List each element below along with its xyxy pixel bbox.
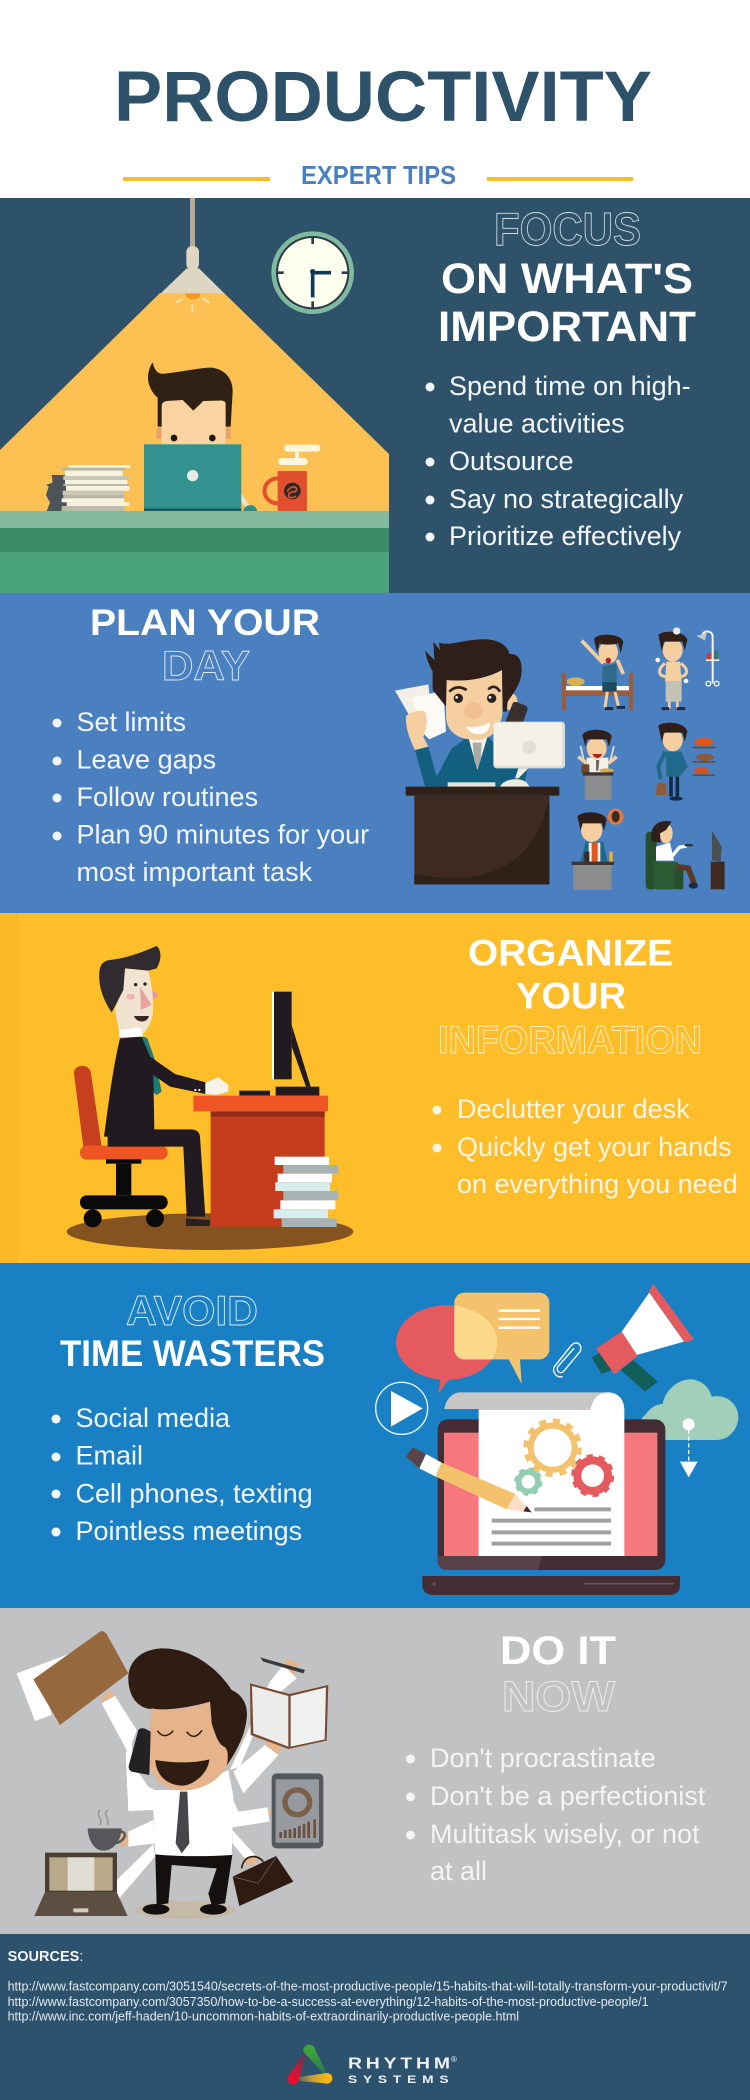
ear — [504, 693, 517, 710]
mini scene: shower — [655, 627, 719, 709]
mini scene: watching tv — [646, 821, 725, 889]
man on the phone at desk — [395, 639, 565, 884]
hand — [406, 711, 428, 750]
logo registered mark: ® — [451, 2055, 457, 2064]
icon: briefcase — [233, 1856, 293, 1906]
icon: open book — [250, 1683, 328, 1749]
cuff buttons — [194, 1089, 200, 1091]
bullet list: focus: Say no strategically — [449, 484, 684, 514]
illustration: multitasking man — [17, 1631, 328, 1919]
panel: focus — [0, 198, 750, 593]
icon: wall clock — [271, 231, 354, 314]
heading: focus on what's important: IMPORTANT — [438, 303, 696, 351]
panel: do it now — [0, 1608, 750, 1934]
bullet list: plan: Plan 90 minutes for your — [76, 820, 369, 850]
heading: focus on what's important: ON WHAT'S — [441, 255, 693, 303]
header — [0, 0, 750, 198]
logo wordmark: RHYTHM — [348, 2054, 450, 2072]
nose — [464, 702, 483, 719]
icon: coffee cup — [88, 1810, 125, 1851]
illustration: man under lamp — [0, 198, 389, 593]
icon: paperclip — [554, 1343, 581, 1377]
bullet list: plan: Set limits — [76, 707, 186, 737]
floor shadow — [67, 1213, 353, 1250]
bullet list: do it now: Don't be a perfectionist — [430, 1781, 706, 1811]
stack of books — [274, 1157, 338, 1227]
suit and trousers — [104, 1037, 207, 1217]
subtitle: EXPERT TIPS — [301, 160, 456, 190]
bullet list: focus: value activities — [449, 408, 625, 438]
heading: organize your information — [438, 932, 702, 1062]
laptop — [144, 444, 241, 511]
bullet list: avoid: Email — [76, 1441, 143, 1471]
collar — [119, 1027, 143, 1037]
icon: cloud — [640, 1379, 738, 1477]
desk — [406, 787, 559, 884]
icon: tablet — [272, 1773, 323, 1848]
title: PRODUCTIVITY — [114, 58, 652, 137]
bullet list: avoid — [52, 1403, 313, 1546]
sources heading: SOURCES: — [8, 1949, 83, 1965]
bullet list: plan: Leave gaps — [76, 745, 216, 775]
heading: plan your day: PLAN YOUR — [90, 601, 320, 643]
bullet list: avoid: Social media — [76, 1403, 231, 1433]
bullet list: organize: Declutter your desk — [457, 1094, 690, 1124]
shirt and arms — [102, 1665, 297, 1899]
bullet list: avoid: Pointless meetings — [76, 1516, 302, 1546]
document — [444, 1392, 624, 1556]
panel: sources footer — [0, 1934, 750, 2100]
logo mark — [287, 2045, 332, 2084]
bullet list: do it now: Don't procrastinate — [430, 1743, 656, 1773]
icon: megaphone — [592, 1284, 694, 1392]
source links — [8, 1979, 728, 2024]
illustration: laptop and media icons — [376, 1284, 738, 1595]
bullet list: focus: Prioritize effectively — [449, 521, 682, 551]
shoe — [186, 1218, 210, 1226]
bullet list: do it now — [406, 1743, 706, 1886]
hand — [205, 1077, 228, 1095]
subtitle rule right — [487, 177, 633, 181]
face — [147, 1702, 228, 1791]
desk — [0, 511, 389, 593]
bullet list: organize — [432, 1094, 738, 1199]
heading: plan your day: DAY — [162, 642, 250, 689]
shirt and tie — [468, 737, 487, 770]
source links: http://www.fastcompany.com/3051540/secrets-of-the-most-productive-people/15-habits-that-will-totally-transform-your-productivit/7 — [8, 1979, 728, 1994]
heading: avoid time wasters — [60, 1287, 325, 1374]
bullet list: organize: on everything you need — [457, 1169, 738, 1199]
ear — [224, 1733, 234, 1766]
heading: avoid time wasters: AVOID — [126, 1287, 258, 1334]
keyboard — [448, 782, 495, 787]
man head — [148, 362, 233, 445]
mouth — [134, 1016, 149, 1021]
panel: plan your day — [0, 593, 750, 913]
mouth — [155, 1759, 209, 1786]
heading: focus on what's important: FOCUS — [494, 203, 641, 255]
heading: organize your information: YOUR — [516, 976, 626, 1016]
hair — [128, 1648, 247, 1766]
illustration: man at computer desk — [67, 946, 353, 1250]
monitor — [493, 722, 565, 787]
gears — [516, 1421, 612, 1495]
heading: avoid time wasters: TIME WASTERS — [60, 1332, 325, 1374]
logo: rhythm systems — [287, 2045, 457, 2086]
floor shadow — [134, 1901, 236, 1919]
source links: http://www.inc.com/jeff-haden/10-uncommon-habits-of-extraordinarily-productive-people.html — [8, 2009, 519, 2024]
icon: play button — [376, 1382, 428, 1434]
bullet list: plan: Follow routines — [76, 782, 258, 812]
keyboard — [239, 1091, 270, 1096]
logo subline: SYSTEMS — [348, 2073, 449, 2086]
heading: plan your day — [90, 601, 320, 689]
icon: laptop — [34, 1853, 128, 1916]
hair — [99, 946, 160, 1013]
chair — [74, 1066, 168, 1227]
tie — [176, 1792, 189, 1853]
heading: do it now — [500, 1629, 616, 1721]
face — [446, 670, 503, 740]
pencil — [406, 1447, 532, 1512]
illustration group: daily routine — [395, 627, 725, 890]
bullet list: plan — [52, 707, 369, 887]
subtitle rule left — [123, 177, 270, 181]
eyes — [134, 982, 147, 986]
hair — [425, 639, 522, 712]
phone — [129, 1728, 151, 1775]
cheek — [126, 994, 135, 1000]
nose — [140, 987, 152, 1010]
source links: http://www.fastcompany.com/3057350/how-to-be-a-success-at-everything/12-habits-of-the-most-productive-people/1 — [8, 1994, 649, 2009]
mini scene: waking up — [562, 635, 633, 711]
eyes — [157, 1730, 202, 1736]
heading: focus on what's important — [438, 203, 696, 351]
mini scene: working at desk — [572, 809, 624, 890]
mini scene: leaving with bag — [655, 723, 715, 801]
icon: red speech bubble — [396, 1305, 497, 1393]
face — [115, 968, 153, 1037]
light cone — [0, 293, 389, 511]
bullet list: do it now: at all — [430, 1856, 487, 1886]
panel: organize your information — [0, 913, 750, 1263]
scene details — [46, 198, 354, 511]
icon: pen — [260, 1657, 305, 1673]
heading: organize your information: INFORMATION — [438, 1019, 702, 1062]
bullet list: focus: Spend time on high- — [449, 371, 691, 401]
icon: yellow speech bubble — [454, 1292, 550, 1384]
heading: do it now: DO IT — [500, 1629, 616, 1673]
icon: hanging lamp — [161, 198, 224, 313]
heading: do it now: NOW — [502, 1673, 615, 1721]
icon: red mug — [265, 445, 320, 511]
smile — [466, 722, 490, 734]
hands — [100, 1658, 299, 1907]
desk — [193, 1096, 328, 1227]
suit — [415, 737, 528, 787]
trousers and shoes — [143, 1854, 232, 1915]
panel: avoid time wasters — [0, 1263, 750, 1608]
bullet list: avoid: Cell phones, texting — [76, 1478, 313, 1508]
icon: folder with papers — [17, 1631, 128, 1725]
eyes and brows — [449, 687, 500, 703]
bullet list: focus — [426, 371, 691, 551]
laptop — [422, 1419, 680, 1595]
hand and pen — [241, 493, 257, 511]
monitor — [272, 992, 319, 1096]
bullet list: plan: most important task — [76, 857, 313, 887]
bullet list: organize: Quickly get your hands — [457, 1132, 732, 1162]
heading: organize your information: ORGANIZE — [468, 932, 673, 974]
mini scene: eating breakfast — [578, 730, 617, 800]
tie — [140, 1035, 162, 1095]
icon: stack of papers — [46, 465, 130, 511]
ears — [113, 991, 157, 1003]
bullet list: do it now: Multitask wisely, or not — [430, 1819, 700, 1849]
bullet list: focus: Outsource — [449, 446, 574, 476]
phone — [505, 702, 528, 723]
papers — [395, 684, 446, 739]
